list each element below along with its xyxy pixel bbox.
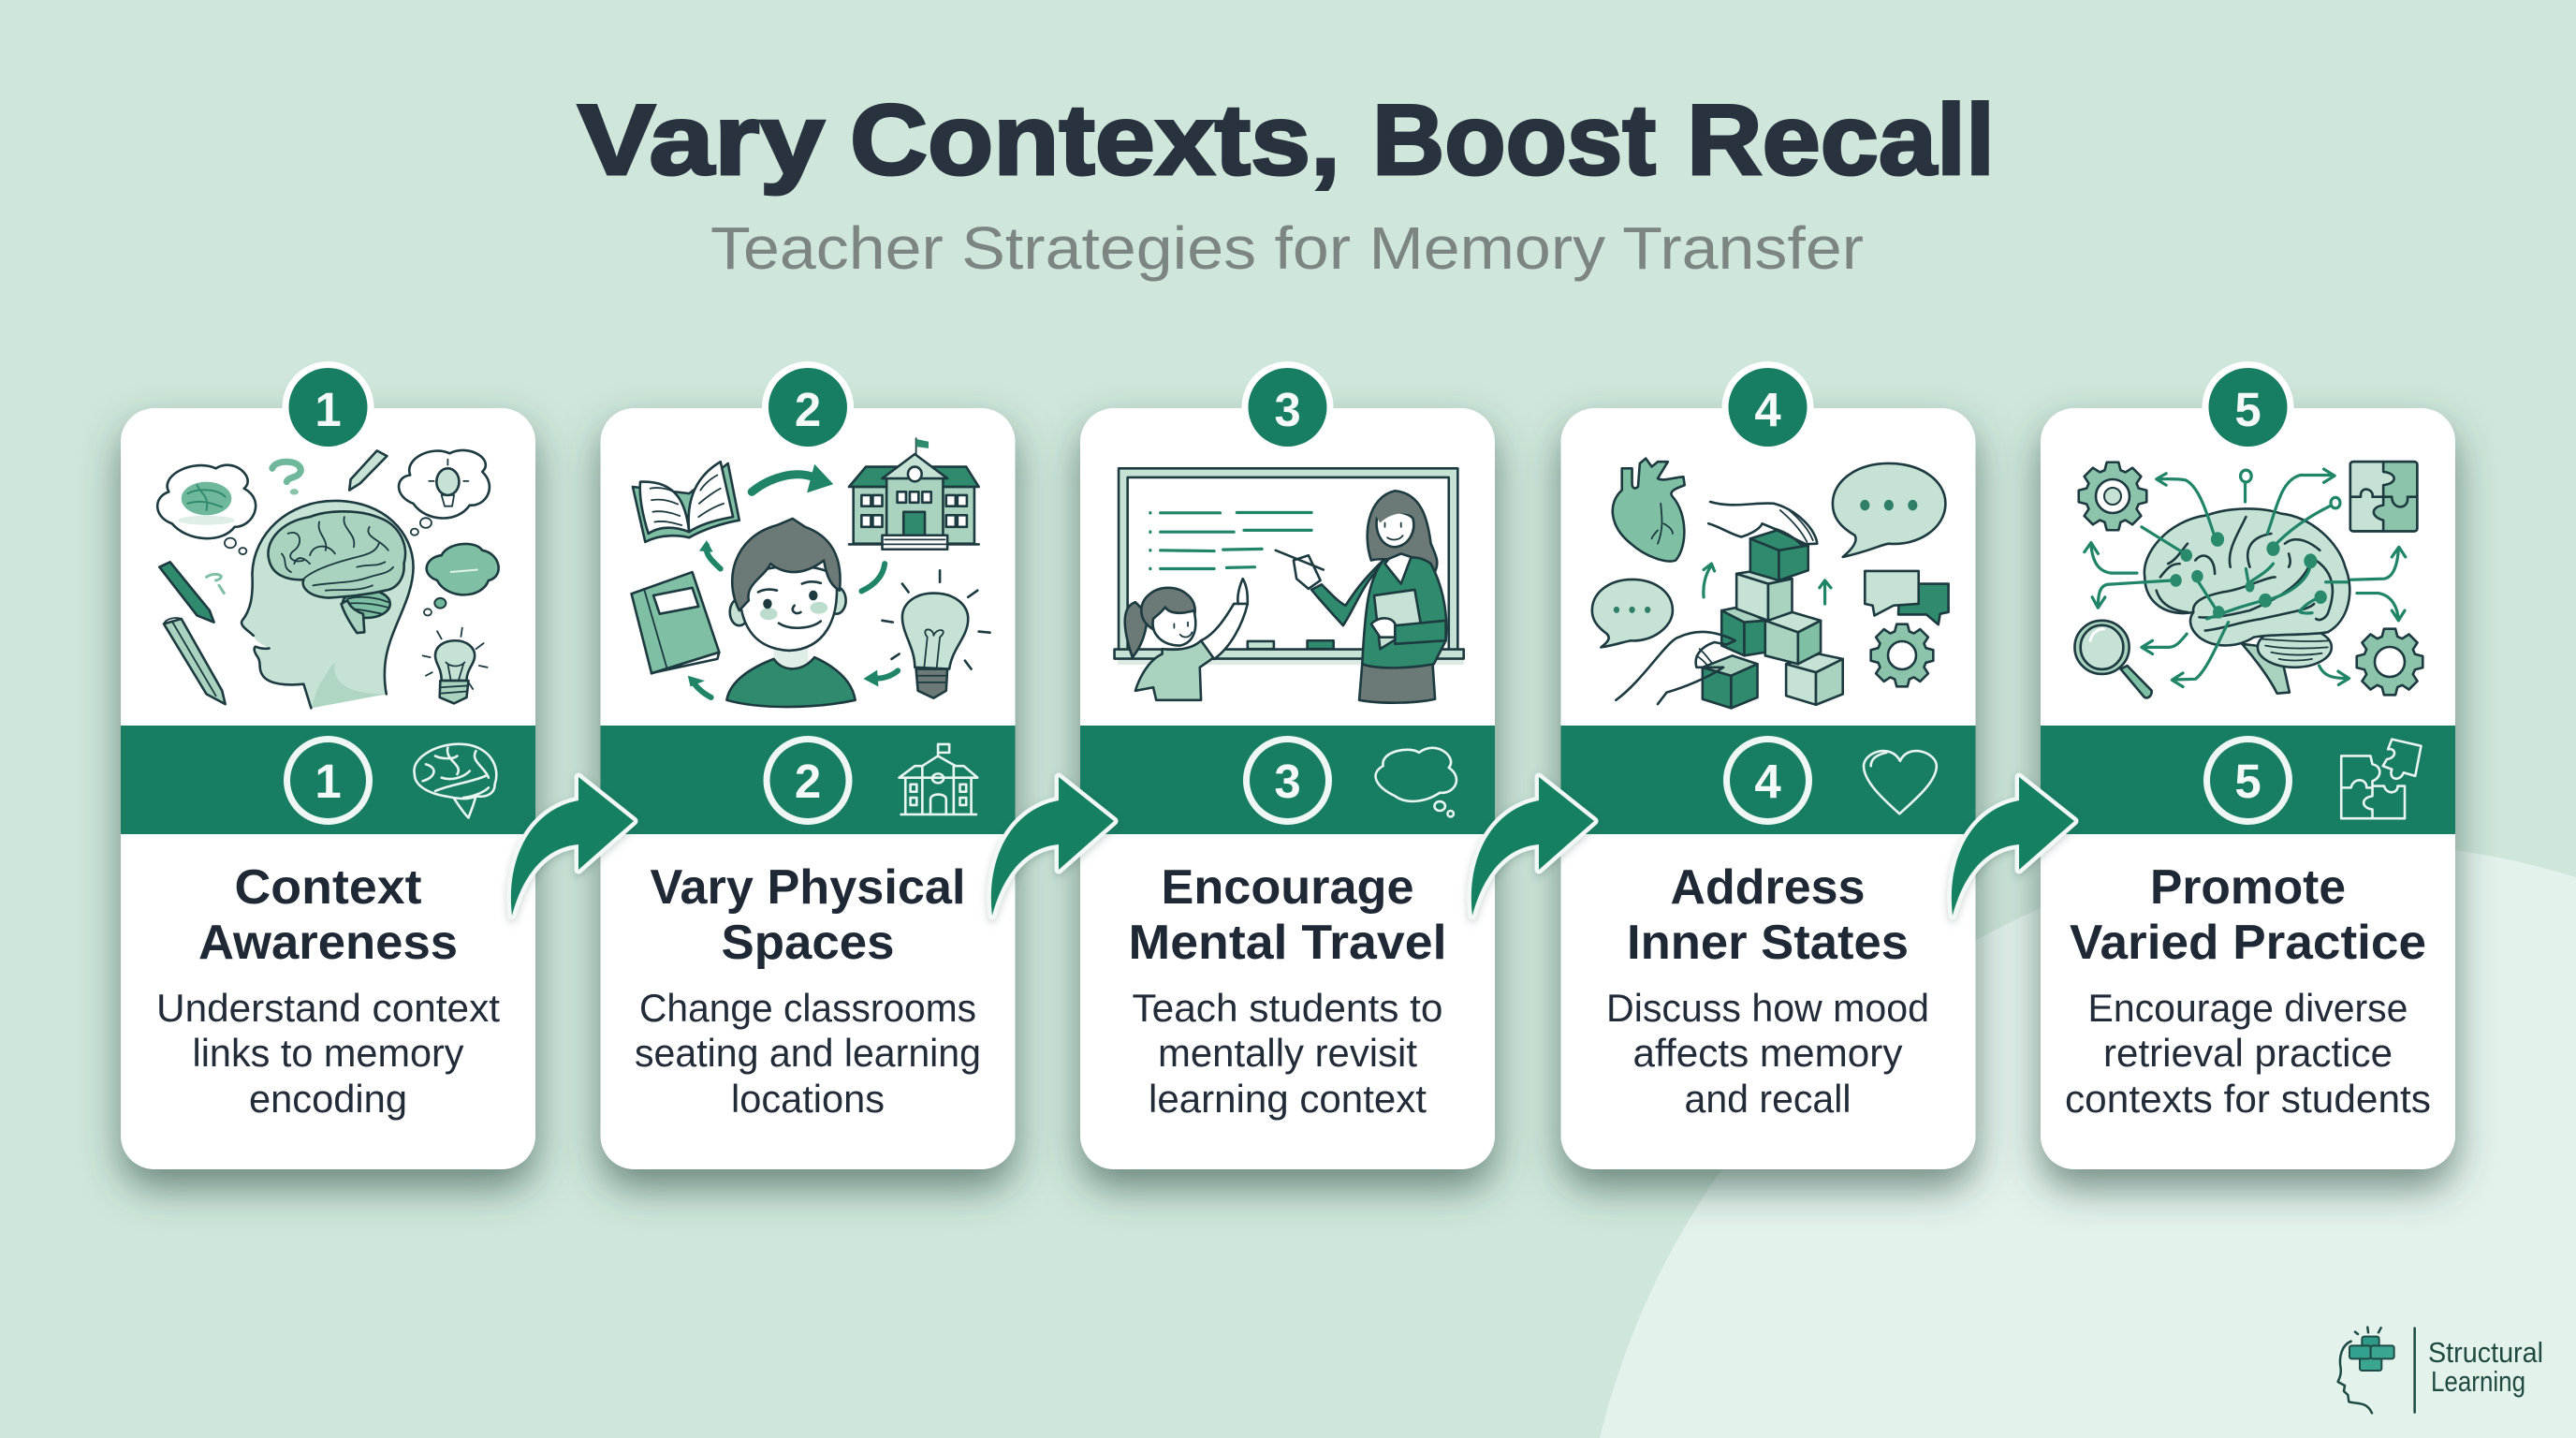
heading: Inner States xyxy=(1627,916,1909,970)
heading: Address xyxy=(1670,860,1865,915)
description: learning context xyxy=(1149,1077,1427,1121)
description: Discuss how mood xyxy=(1606,986,1929,1030)
description: encoding xyxy=(249,1077,407,1121)
ring number 4: 4 xyxy=(1754,755,1781,808)
step badge 4: 4 xyxy=(1754,383,1781,436)
description: seating and learning xyxy=(635,1031,981,1075)
heading: Mental Travel xyxy=(1129,916,1447,970)
icon: school outline xyxy=(900,744,977,814)
arrow 2 to 3 xyxy=(991,777,1114,916)
arrow 1 to 2 xyxy=(511,777,634,916)
thought cloud: bulb xyxy=(399,450,490,536)
panel: vary physical spaces xyxy=(601,361,1015,1169)
step badge 2: 2 xyxy=(795,383,821,436)
heading xyxy=(198,860,458,970)
description: affects memory xyxy=(1632,1031,1902,1075)
heading xyxy=(1627,860,1909,970)
heading xyxy=(650,860,966,970)
ring number 2 xyxy=(767,740,849,822)
hands xyxy=(1616,502,1817,704)
heading: Encourage xyxy=(1161,860,1413,915)
heading: Varied Practice xyxy=(2070,916,2426,970)
ring number 5: 5 xyxy=(2234,755,2261,808)
description: Understand context xyxy=(156,986,500,1030)
description xyxy=(1606,986,1929,1121)
light bulb xyxy=(882,570,990,698)
heart xyxy=(1613,459,1685,561)
open book xyxy=(633,462,739,542)
description: Change classrooms xyxy=(639,986,976,1030)
speech bubbles xyxy=(1592,463,1949,647)
description xyxy=(635,986,981,1121)
magnifier xyxy=(2074,621,2152,697)
ring number 3 xyxy=(1247,740,1329,822)
description xyxy=(2065,986,2431,1121)
description: mentally revisit xyxy=(1158,1031,1417,1075)
small arrows xyxy=(1704,564,1831,604)
logo: Structural Learning: Learning xyxy=(2431,1365,2525,1398)
step badge 4 xyxy=(1722,361,1814,453)
ring number 5 xyxy=(2207,740,2290,822)
school building xyxy=(849,438,979,550)
heading: Promote xyxy=(2150,860,2346,915)
network nodes xyxy=(2170,532,2327,619)
logo: Structural Learning xyxy=(2338,1328,2543,1413)
description: Teach students to xyxy=(1133,986,1443,1030)
title: Recall xyxy=(1687,83,1995,196)
student xyxy=(1125,579,1248,700)
ring number 2: 2 xyxy=(795,755,821,808)
description xyxy=(1133,986,1443,1121)
description: contexts for students xyxy=(2065,1077,2431,1121)
ring number 1 xyxy=(286,740,369,822)
title: Boost xyxy=(1372,83,1656,196)
band 3 xyxy=(1080,726,1495,834)
illustration: boy, school, books, bulb xyxy=(632,438,990,707)
gyri xyxy=(2157,517,2333,631)
description xyxy=(156,986,500,1121)
band 4 xyxy=(1561,726,1975,834)
illustration: heart, blocks, speech bubbles xyxy=(1592,459,1949,708)
illustration: brain network xyxy=(2074,462,2417,697)
ring number 3: 3 xyxy=(1274,755,1301,808)
pencils xyxy=(159,450,387,704)
illustration: teacher and student at board xyxy=(1115,468,1464,703)
thought cloud: brain xyxy=(157,465,256,554)
green cloud xyxy=(424,544,499,615)
network arrows xyxy=(2085,469,2406,687)
step badge 5: 5 xyxy=(2234,383,2261,436)
step badge 2 xyxy=(762,361,854,453)
icon: heart outline xyxy=(1864,751,1937,814)
step badge 3 xyxy=(1241,361,1333,453)
panel: context awareness xyxy=(121,361,535,1169)
icons: gears xyxy=(2079,462,2422,695)
subtitle: Teacher Strategies for Memory Transfer xyxy=(710,214,1864,282)
heading: Spaces xyxy=(721,916,895,970)
logo: Structural Learning: Structural xyxy=(2428,1336,2543,1369)
description: locations xyxy=(731,1077,885,1121)
ring number 4 xyxy=(1726,740,1808,822)
icon: puzzle outline xyxy=(2341,740,2421,818)
teacher xyxy=(1276,491,1446,703)
brain xyxy=(2144,508,2349,645)
green book xyxy=(632,572,719,673)
heading: Context xyxy=(234,860,421,915)
whiteboard xyxy=(1115,468,1464,665)
question mark xyxy=(272,462,300,482)
description: links to memory xyxy=(193,1031,464,1075)
panel: address inner states xyxy=(1561,361,1975,1169)
icon: thought cloud xyxy=(1376,748,1456,816)
description: retrieval practice xyxy=(2103,1031,2393,1075)
panel: promote varied practice xyxy=(2041,361,2455,1169)
illustration: head with brain and thoughts xyxy=(157,450,499,708)
boy xyxy=(726,519,856,707)
step badge 3: 3 xyxy=(1274,383,1301,436)
heading: Awareness xyxy=(198,916,458,970)
step badge 1: 1 xyxy=(315,383,342,436)
light bulb xyxy=(423,628,488,703)
description: and recall xyxy=(1685,1077,1852,1121)
blocks xyxy=(1703,530,1843,708)
heading xyxy=(2070,860,2426,970)
puzzle xyxy=(2350,462,2417,531)
title: Contexts, xyxy=(850,83,1340,196)
band 2 xyxy=(601,726,1015,834)
step badge 1 xyxy=(283,361,374,453)
band 1 xyxy=(121,726,535,834)
cerebellum and stem xyxy=(2242,627,2332,694)
arrow 4 to 5 xyxy=(1952,777,2074,916)
arrow 3 to 4 xyxy=(1471,777,1594,916)
ring number 1: 1 xyxy=(315,755,342,808)
heading: Vary Physical xyxy=(650,860,966,915)
step badge 5 xyxy=(2202,361,2293,453)
title: Vary xyxy=(578,83,825,196)
description: Encourage diverse xyxy=(2087,986,2408,1030)
band 5 xyxy=(2041,726,2455,834)
panel: encourage mental travel xyxy=(1080,361,1495,1169)
icon: gear xyxy=(1871,624,1933,686)
title xyxy=(578,83,1995,196)
icon: brain outline xyxy=(414,744,496,818)
circular arrows xyxy=(688,464,898,697)
heading xyxy=(1129,860,1447,970)
